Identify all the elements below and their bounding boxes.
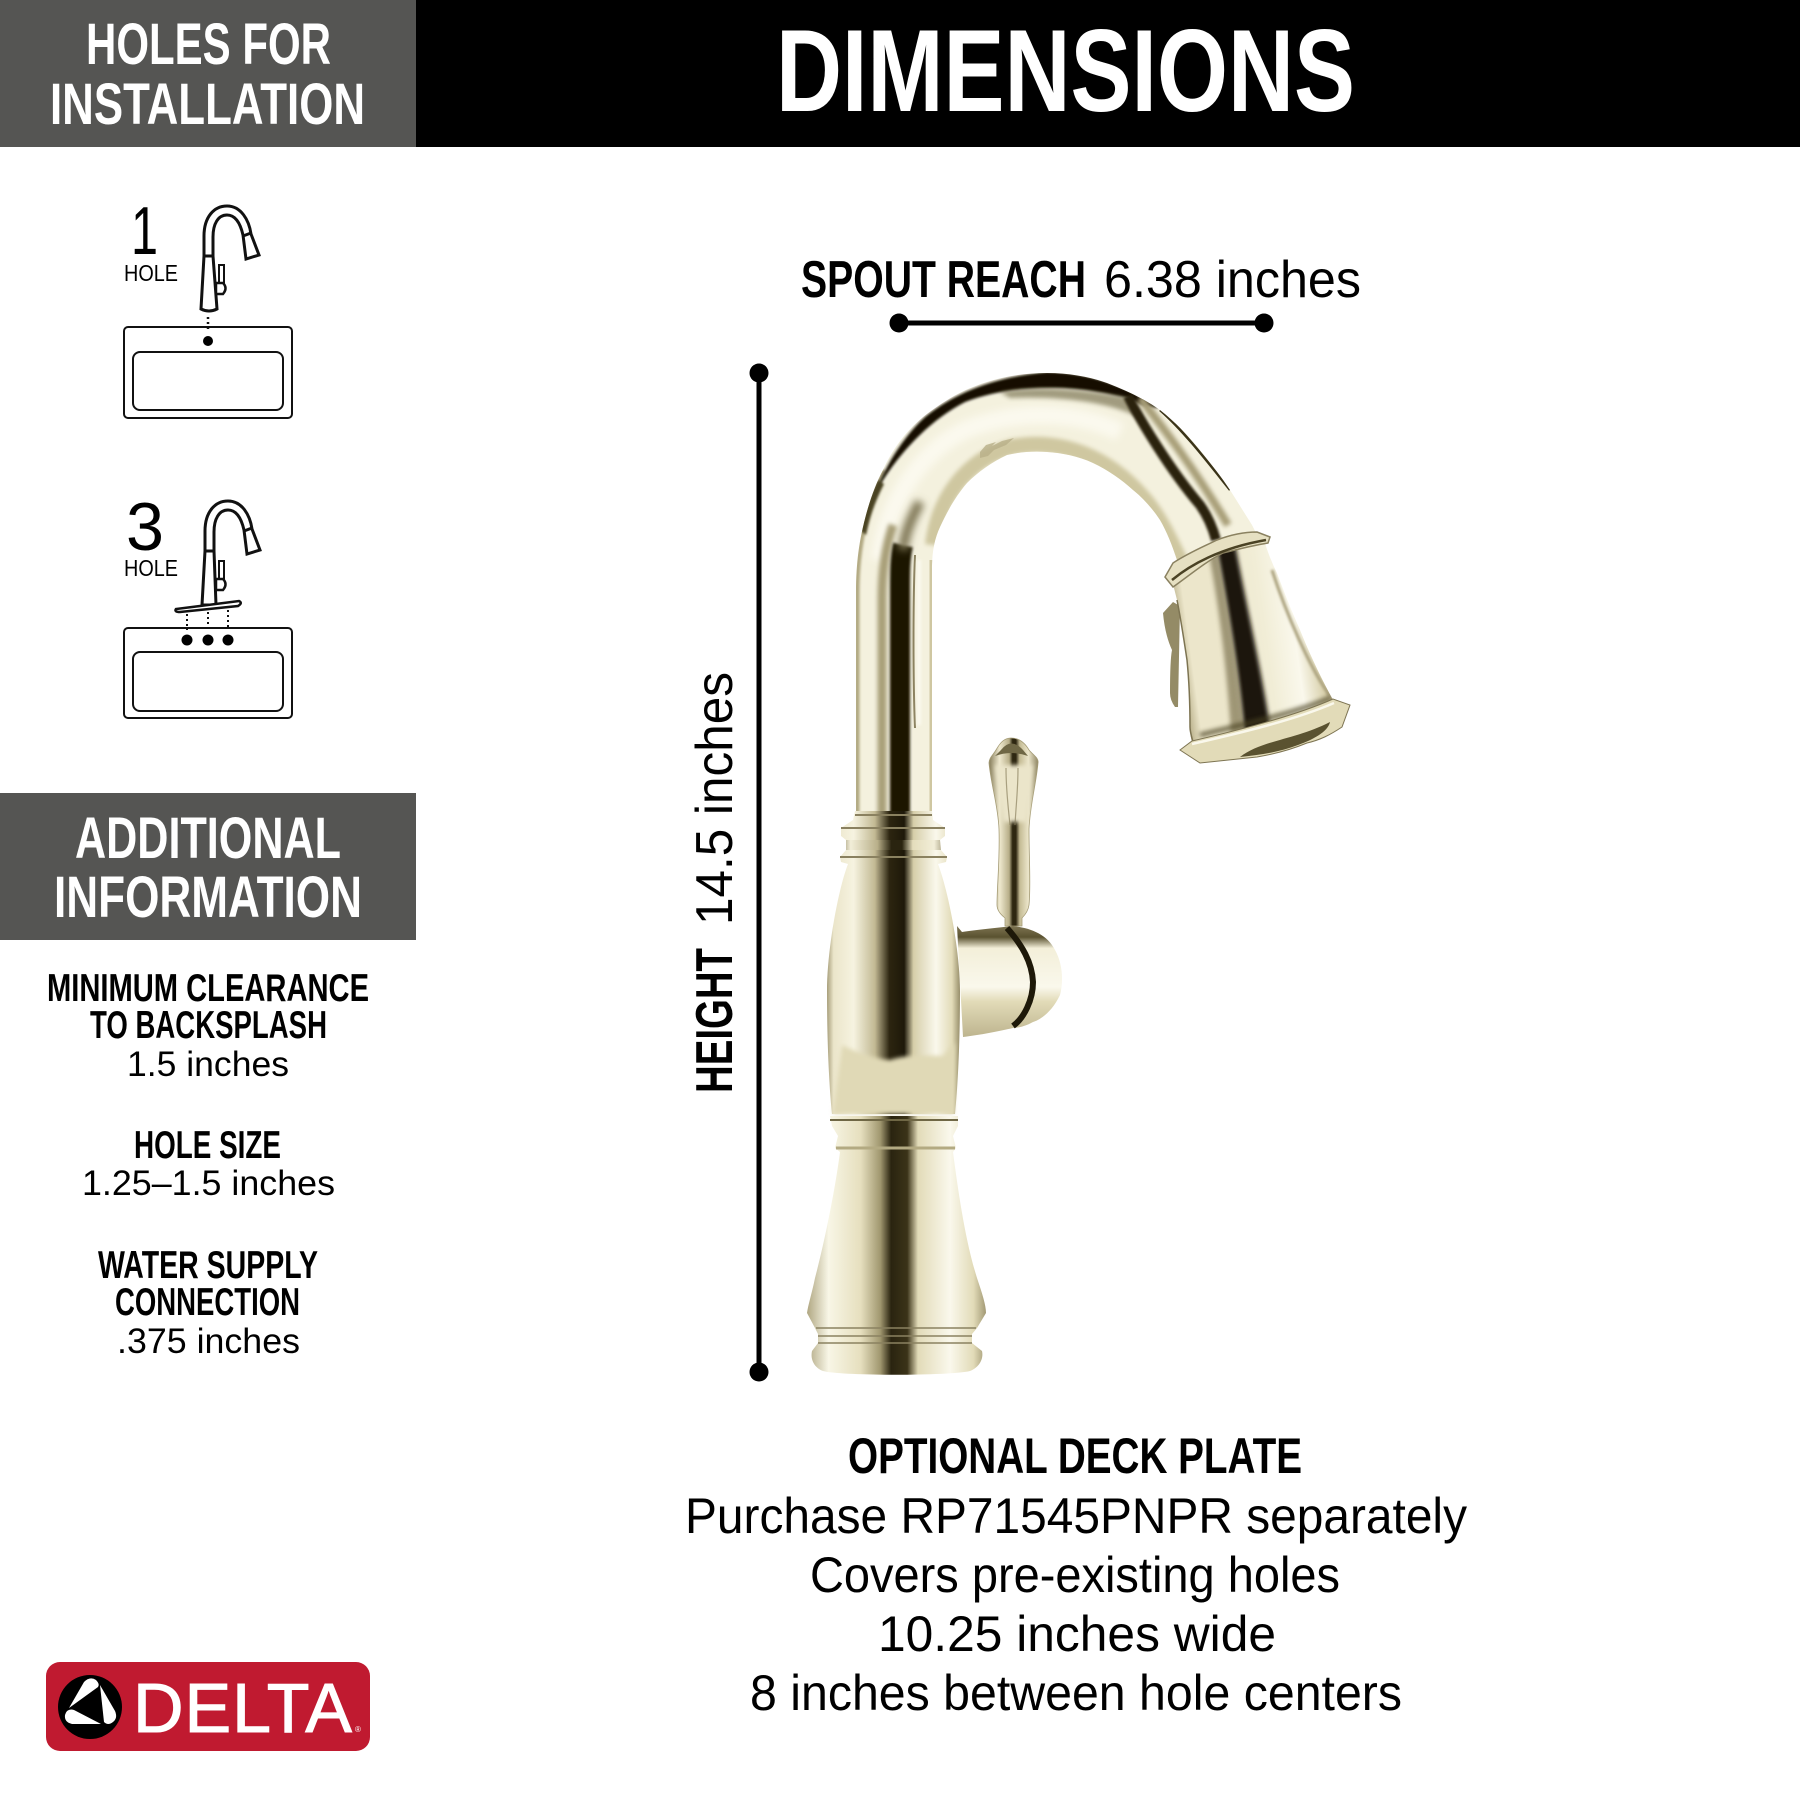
- bright crown band: [880, 415, 1120, 560]
- dimension: height: [686, 364, 768, 1382]
- logo: delta: DELTA: [133, 1669, 352, 1747]
- logo: delta: [46, 1662, 370, 1751]
- header: additional information: INFORMATION: [54, 865, 362, 930]
- header: additional information: [0, 793, 416, 940]
- head rim: [1180, 699, 1350, 763]
- header: holes for installation: INSTALLATION: [50, 72, 365, 137]
- text block: hole size: 1.25–1.5 inches: [82, 1164, 335, 1203]
- head collar: [1165, 532, 1270, 587]
- text block: minimum clearance: 1.5 inches: [127, 1045, 289, 1084]
- header: holes for installation: [0, 0, 416, 147]
- product image: faucet: [807, 372, 1350, 1375]
- text block: minimum clearance: MINIMUM CLEARANCE: [47, 967, 369, 1010]
- dimension: spout reach: 6.38 inches: [1104, 251, 1361, 309]
- icon: three hole sink installation with deck plate: HOLE: [124, 555, 178, 581]
- text block: optional deck plate: 8 inches between hole centers: [750, 1665, 1402, 1721]
- faucet handle lever: [989, 738, 1038, 926]
- logo: delta: ®: [355, 1725, 361, 1734]
- text block: hole size: HOLE SIZE: [134, 1124, 281, 1167]
- dimension: height: HEIGHT: [686, 948, 744, 1093]
- underside beige band: [933, 445, 1182, 565]
- dimension: spout reach: SPOUT REACH: [801, 251, 1086, 309]
- dimension: height: 14.5 inches: [686, 672, 744, 925]
- header: additional information: ADDITIONAL: [75, 806, 341, 871]
- icon: one hole sink installation: HOLE: [124, 260, 178, 286]
- text block: water supply connection: WATER SUPPLY: [98, 1244, 318, 1287]
- text block: water supply connection: CONNECTION: [115, 1281, 300, 1324]
- text block: minimum clearance: TO BACKSPLASH: [90, 1004, 327, 1047]
- text block: water supply connection: [98, 1244, 318, 1361]
- icon: one hole sink installation: 1: [131, 193, 158, 269]
- text block: water supply connection: .375 inches: [117, 1322, 300, 1361]
- text block: optional deck plate: OPTIONAL DECK PLATE: [848, 1428, 1302, 1484]
- text block: minimum clearance: [47, 967, 369, 1084]
- title: dimensions: [416, 0, 1800, 147]
- text block: optional deck plate: Covers pre-existing holes: [810, 1547, 1340, 1603]
- text block: optional deck plate: Purchase RP71545PNPR separately: [685, 1488, 1467, 1544]
- outer dark crescent: [878, 373, 1159, 484]
- icon: three hole sink installation with deck plate: [124, 489, 292, 718]
- faucet lower base: [807, 1116, 986, 1375]
- dimension: spout reach: [801, 251, 1361, 332]
- inner highlight: [914, 555, 915, 728]
- faucet handle hub: [957, 926, 1062, 1037]
- text block: hole size: [82, 1124, 335, 1203]
- title: dimensions: DIMENSIONS: [776, 5, 1355, 136]
- left shoulder shading: [882, 525, 893, 815]
- text block: optional deck plate: [685, 1428, 1467, 1721]
- faucet spout: [856, 372, 1262, 815]
- text block: optional deck plate: 10.25 inches wide: [878, 1606, 1276, 1662]
- icon: three hole sink installation with deck plate: 3: [126, 489, 164, 565]
- header: holes for installation: HOLES FOR: [86, 12, 331, 77]
- right side dark band: [1128, 396, 1216, 540]
- icon: one hole sink installation: [124, 193, 292, 418]
- dark tube stripe: [900, 545, 903, 815]
- faucet spray head: [1163, 532, 1350, 763]
- pit mark: [980, 438, 1014, 458]
- faucet upper body: [827, 811, 960, 1114]
